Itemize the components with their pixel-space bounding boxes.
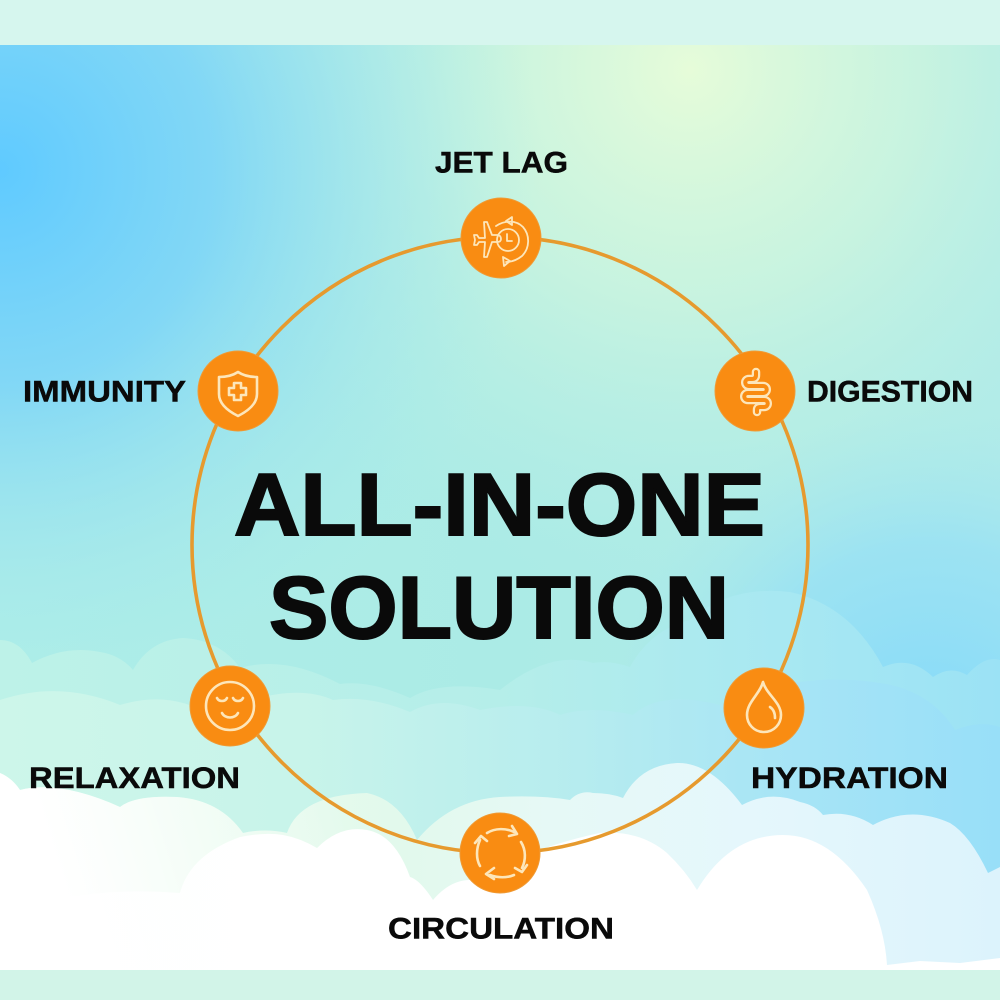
node: immunity: IMMUNITY (23, 376, 186, 408)
icon: calm face (190, 666, 270, 746)
icon: intestine (715, 351, 795, 431)
icon: plane and clock (461, 198, 541, 278)
node: hydration (724, 668, 948, 795)
node: circulation (388, 813, 614, 946)
node: digestion: DIGESTION (807, 376, 973, 408)
bottom band (0, 970, 1000, 1000)
icon: water drop (724, 668, 804, 748)
node: relaxation: RELAXATION (29, 762, 240, 795)
node: relaxation (29, 666, 270, 795)
title: SOLUTION (269, 558, 729, 657)
node: jet lag (435, 146, 568, 278)
icon: shield with cross (198, 351, 278, 431)
clouds (0, 591, 1000, 970)
title (234, 455, 765, 657)
top band (0, 0, 1000, 45)
ring connecting the benefits (192, 237, 808, 853)
node: circulation: CIRCULATION (388, 912, 614, 946)
node: digestion (715, 351, 973, 431)
title: ALL-IN-ONE (234, 455, 765, 554)
node: hydration: HYDRATION (751, 762, 948, 795)
icon: circular arrows (460, 813, 540, 893)
node: jet lag: JET LAG (435, 146, 568, 180)
node: immunity (23, 351, 278, 431)
